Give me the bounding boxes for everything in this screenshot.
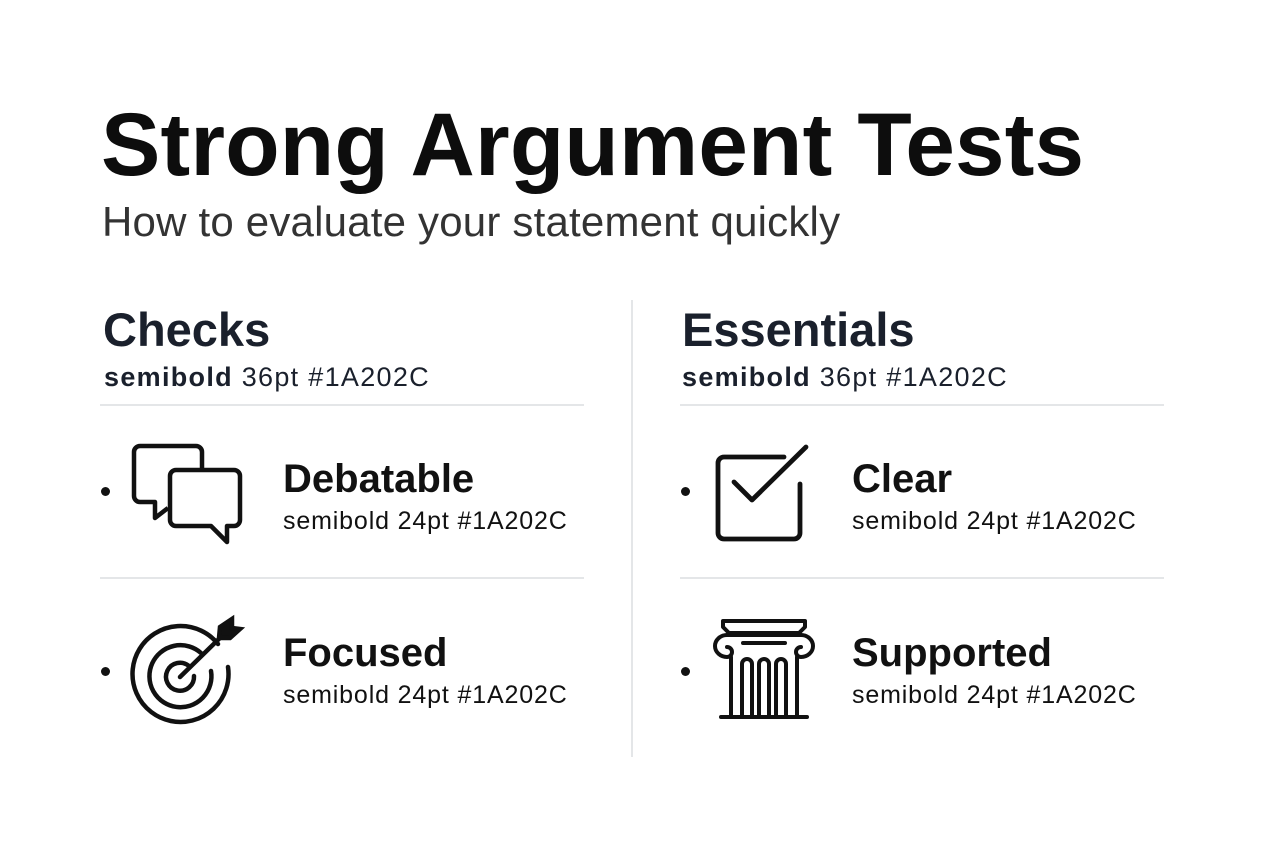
icon: speech bubbles	[132, 444, 242, 544]
heading note: semibold 36pt #1A202C	[104, 362, 430, 392]
subtitle: How to evaluate your statement quickly	[102, 198, 840, 245]
label: Supported	[852, 631, 1052, 675]
label: Clear	[852, 457, 952, 501]
title: Strong Argument Tests	[101, 94, 1084, 194]
label note: semibold 24pt #1A202C	[283, 681, 568, 709]
item: debatable	[101, 444, 568, 544]
icon: column	[713, 619, 815, 719]
label note: semibold 24pt #1A202C	[852, 681, 1137, 709]
heading: essentials: Essentials	[682, 303, 915, 356]
heading: checks: Checks	[103, 303, 270, 356]
icon: checkbox	[716, 444, 808, 542]
item: focused	[101, 614, 568, 724]
panel: essentials	[680, 303, 1164, 719]
icon: target	[130, 614, 246, 724]
heading note: semibold 36pt #1A202C	[682, 362, 1008, 392]
label note: semibold 24pt #1A202C	[852, 507, 1137, 535]
item: supported	[681, 619, 1137, 719]
label: Debatable	[283, 457, 474, 501]
label: Focused	[283, 631, 447, 675]
label note: semibold 24pt #1A202C	[283, 507, 568, 535]
item: clear	[681, 444, 1137, 542]
panel: checks	[100, 303, 584, 724]
